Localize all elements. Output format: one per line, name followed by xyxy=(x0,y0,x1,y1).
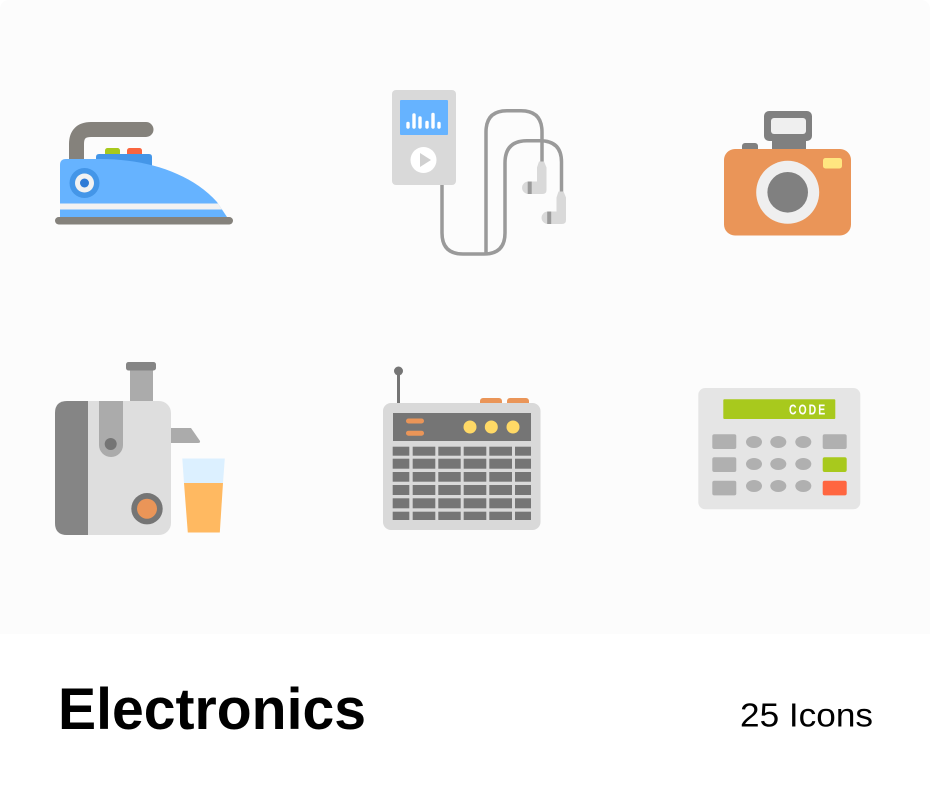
icon: music player with earphones xyxy=(392,90,566,254)
icon: clothes iron xyxy=(55,130,233,224)
icon: code keypad: CODE xyxy=(789,402,827,418)
icon count label: 25 Icons xyxy=(740,697,873,734)
icon: juicer with glass xyxy=(55,362,225,535)
icon: camera xyxy=(724,111,851,236)
title: Electronics xyxy=(58,677,366,742)
icon: radio xyxy=(383,366,540,530)
icon: code keypad xyxy=(698,388,860,509)
